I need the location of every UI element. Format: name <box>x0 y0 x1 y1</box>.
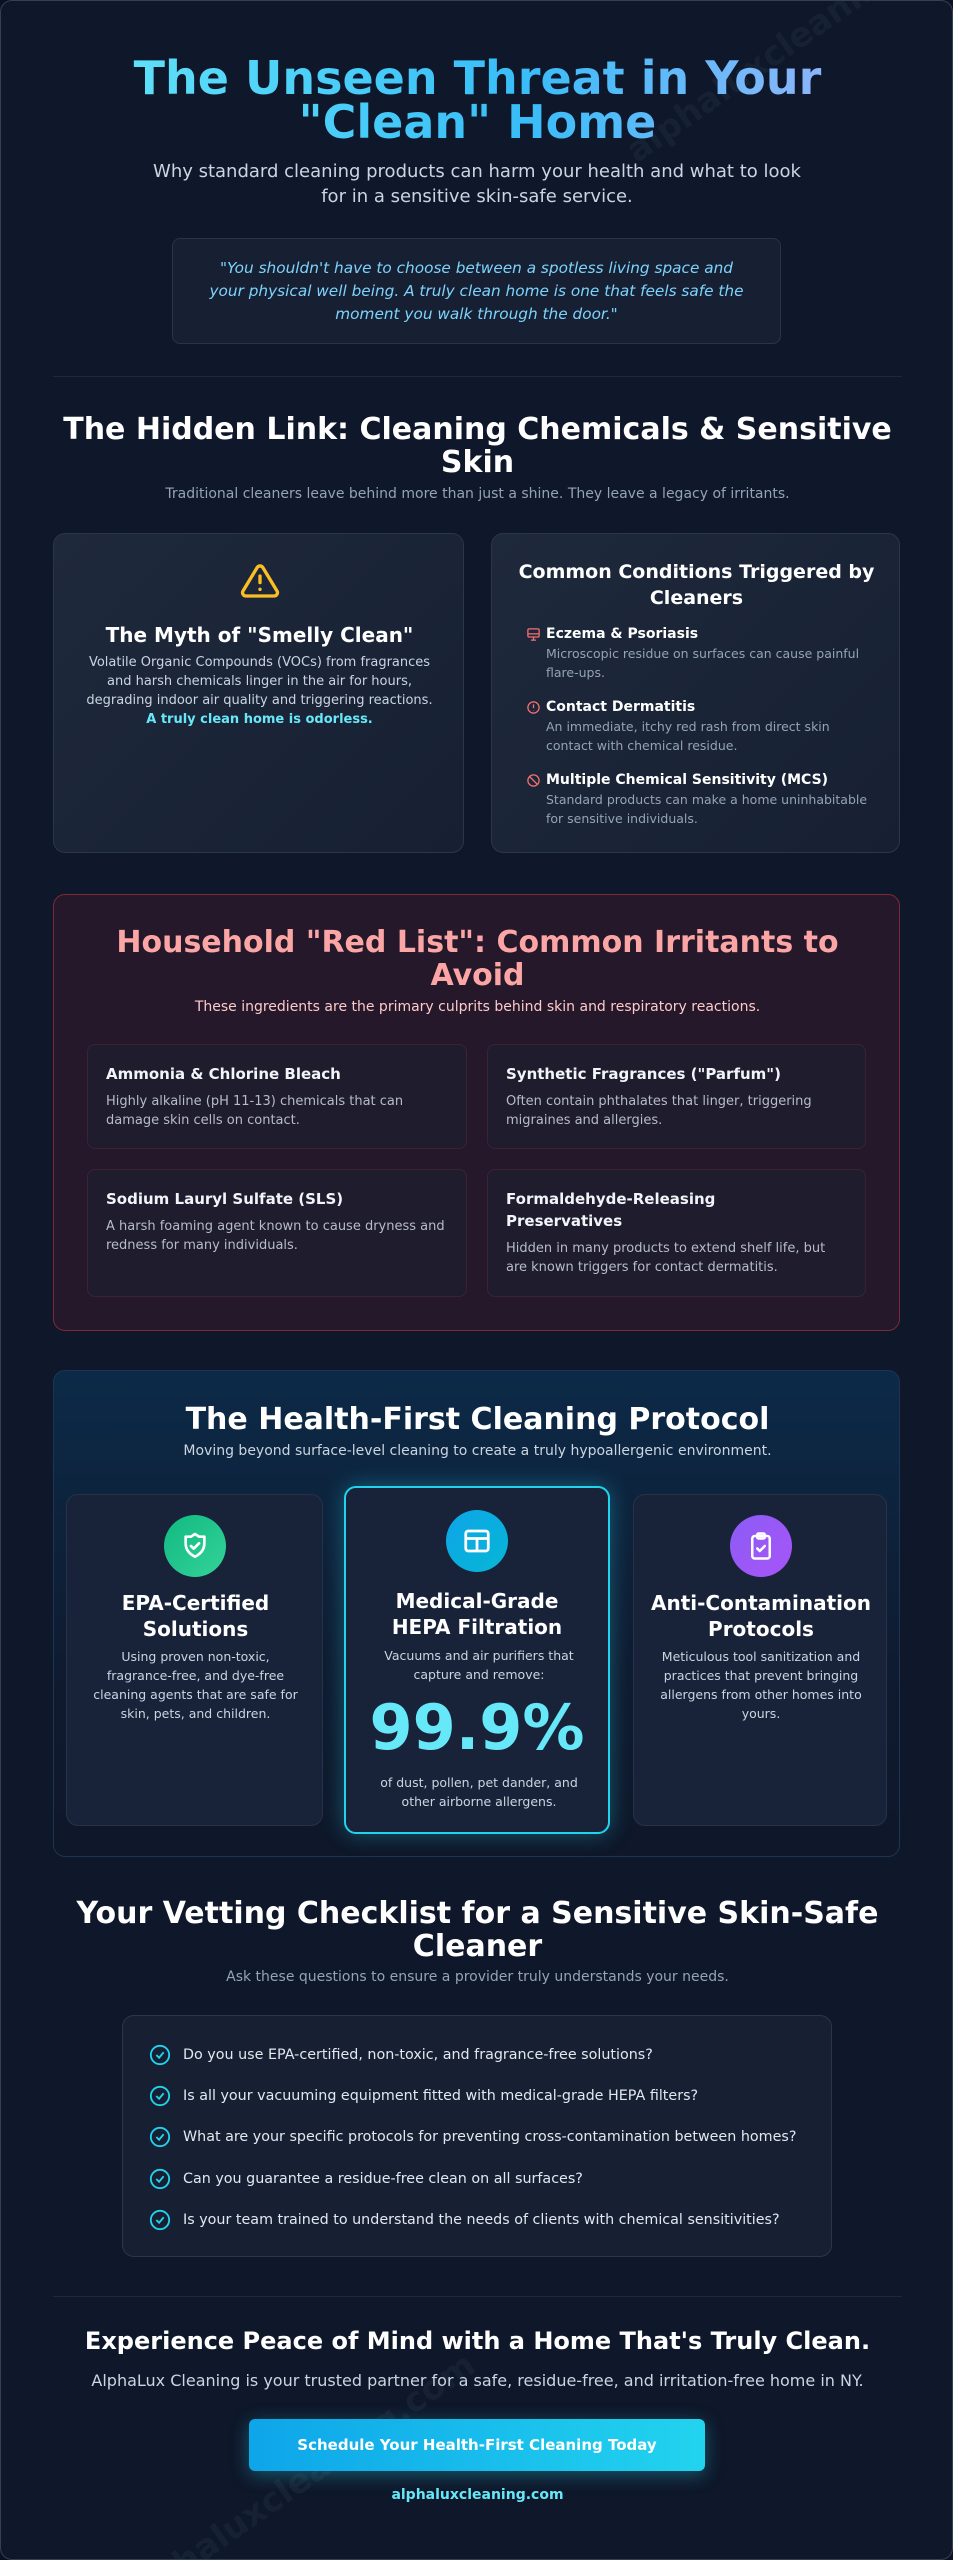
subtitle: Why standard cleaning products can harm your health and what to look for in a sensitive skin-safe service. <box>153 161 801 207</box>
conditions title: Common Conditions Triggered by Cleaners <box>519 561 874 609</box>
irritant: SLS <box>87 1169 467 1297</box>
irritant: fragrances <box>487 1044 866 1149</box>
protocol card: EPA: EPA-Certified Solutions <box>122 1591 269 1641</box>
irritant: ammonia: Highly alkaline (pH 11-13) chemicals that can damage skin cells on contact. <box>106 1094 403 1128</box>
irritant: ammonia: Ammonia & Chlorine Bleach <box>106 1065 341 1083</box>
quote box <box>172 238 781 344</box>
panel: myth of smelly clean <box>53 533 464 853</box>
irritant: formaldehyde <box>487 1169 866 1297</box>
protocol card: anti-contamination: Meticulous tool sanitization and practices that prevent bringing allergens from other homes into yours. <box>660 1649 862 1721</box>
heading: hidden link: The Hidden Link: Cleaning Chemicals & Sensitive Skin <box>63 412 892 480</box>
CTA button: Schedule Your Health-First Cleaning Today <box>297 2436 657 2454</box>
panel: red list <box>53 894 900 1331</box>
myth text: Volatile Organic Compounds (VOCs) from fragrances and harsh chemicals linger in the air for hours, degrading indoor air quality and triggering reactions. A truly clean home is odorless. <box>86 655 433 727</box>
check item 5: Is your team trained to understand the needs of clients with chemical sensitivities? <box>183 2212 780 2228</box>
condition: MCS: Standard products can make a home uninhabitable for sensitive individuals. <box>546 792 867 826</box>
protocol title: The Health-First Cleaning Protocol <box>186 1402 769 1437</box>
condition: MCS <box>527 772 867 826</box>
icon: filter <box>446 1510 508 1572</box>
check item 1: Do you use EPA-certified, non-toxic, and fragrance-free solutions? <box>183 2047 653 2063</box>
checklist box <box>122 2015 832 2257</box>
irritant: SLS: A harsh foaming agent known to cause dryness and redness for many individuals. <box>106 1219 445 1253</box>
condition: dermatitis <box>527 699 830 753</box>
title <box>41 56 914 144</box>
title: The Unseen Threat in Your <box>134 51 821 105</box>
condition: eczema: Eczema & Psoriasis <box>546 626 698 642</box>
check item 2: Is all your vacuuming equipment fitted with medical-grade HEPA filters? <box>183 2088 698 2104</box>
myth title: The Myth of "Smelly Clean" <box>106 623 413 647</box>
panel: common conditions <box>491 533 900 853</box>
irritant: ammonia <box>87 1044 467 1149</box>
title: "Clean" Home <box>299 95 656 149</box>
CTA button <box>249 2419 705 2471</box>
icon: shield check <box>164 1515 226 1577</box>
irritant: SLS: Sodium Lauryl Sulfate (SLS) <box>106 1190 343 1208</box>
condition: eczema: Microscopic residue on surfaces can cause painful flare-ups. <box>546 646 859 680</box>
protocol card: HEPA <box>344 1486 610 1834</box>
protocol card: HEPA: of dust, pollen, pet dander, and other airborne allergens. <box>380 1775 578 1809</box>
protocol card: HEPA: Medical-Grade HEPA Filtration <box>392 1589 562 1639</box>
irritant: fragrances: Synthetic Fragrances ("Parfum") <box>506 1065 781 1083</box>
icon: clipboard check <box>730 1515 792 1577</box>
CTA text: AlphaLux Cleaning is your trusted partner for a safe, residue-free, and irritation-free home in NY. <box>91 2371 864 2390</box>
check item 4: Can you guarantee a residue-free clean on all surfaces? <box>183 2171 583 2187</box>
subheading: hidden link: Traditional cleaners leave behind more than just a shine. They leave a legacy of irritants. <box>165 486 790 502</box>
protocol card: anti-contamination: Anti-Contamination Protocols <box>651 1591 871 1641</box>
condition: dermatitis: Contact Dermatitis <box>546 699 695 715</box>
protocol card: anti-contamination <box>633 1494 887 1826</box>
irritant: formaldehyde: Formaldehyde-Releasing Preservatives <box>506 1190 715 1230</box>
condition: dermatitis: An immediate, itchy red rash from direct skin contact with chemical residue. <box>546 719 830 753</box>
protocol card: EPA <box>66 1494 323 1826</box>
irritant: fragrances: Often contain phthalates that linger, triggering migraines and allergies. <box>506 1094 812 1128</box>
protocol subtitle: Moving beyond surface-level cleaning to create a truly hypoallergenic environment. <box>183 1443 772 1459</box>
protocol card: HEPA: Vacuums and air purifiers that capture and remove: <box>384 1648 574 1682</box>
red list subtitle: These ingredients are the primary culprits behind skin and respiratory reactions. <box>195 999 760 1015</box>
panel: health-first protocol <box>53 1370 900 1857</box>
website link: alphaluxcleaning.com <box>391 2487 564 2503</box>
CTA heading: Experience Peace of Mind with a Home That's Truly Clean. <box>85 2327 870 2355</box>
icon: warning <box>240 564 280 598</box>
condition: MCS: Multiple Chemical Sensitivity (MCS) <box>546 772 828 788</box>
red list title: Household "Red List": Common Irritants to Avoid <box>116 925 839 993</box>
subheading: checklist: Ask these questions to ensure a provider truly understands your needs. <box>226 1969 729 1985</box>
quote box: "You shouldn't have to choose between a spotless living space and your physical well being. A truly clean home is one that feels safe the moment you walk through the door." <box>209 258 744 322</box>
protocol card: EPA: Using proven non-toxic, fragrance-free, and dye-free cleaning agents that are safe for skin, pets, and children. <box>93 1649 298 1721</box>
check item 3: What are your specific protocols for preventing cross-contamination between homes? <box>183 2129 796 2145</box>
irritant: formaldehyde: Hidden in many products to extend shelf life, but are known triggers for contact dermatitis. <box>506 1241 825 1275</box>
heading: checklist: Your Vetting Checklist for a Sensitive Skin-Safe Cleaner <box>77 1896 878 1964</box>
condition: eczema <box>527 626 859 680</box>
stat: 99.9%: 99.9% <box>369 1691 585 1764</box>
